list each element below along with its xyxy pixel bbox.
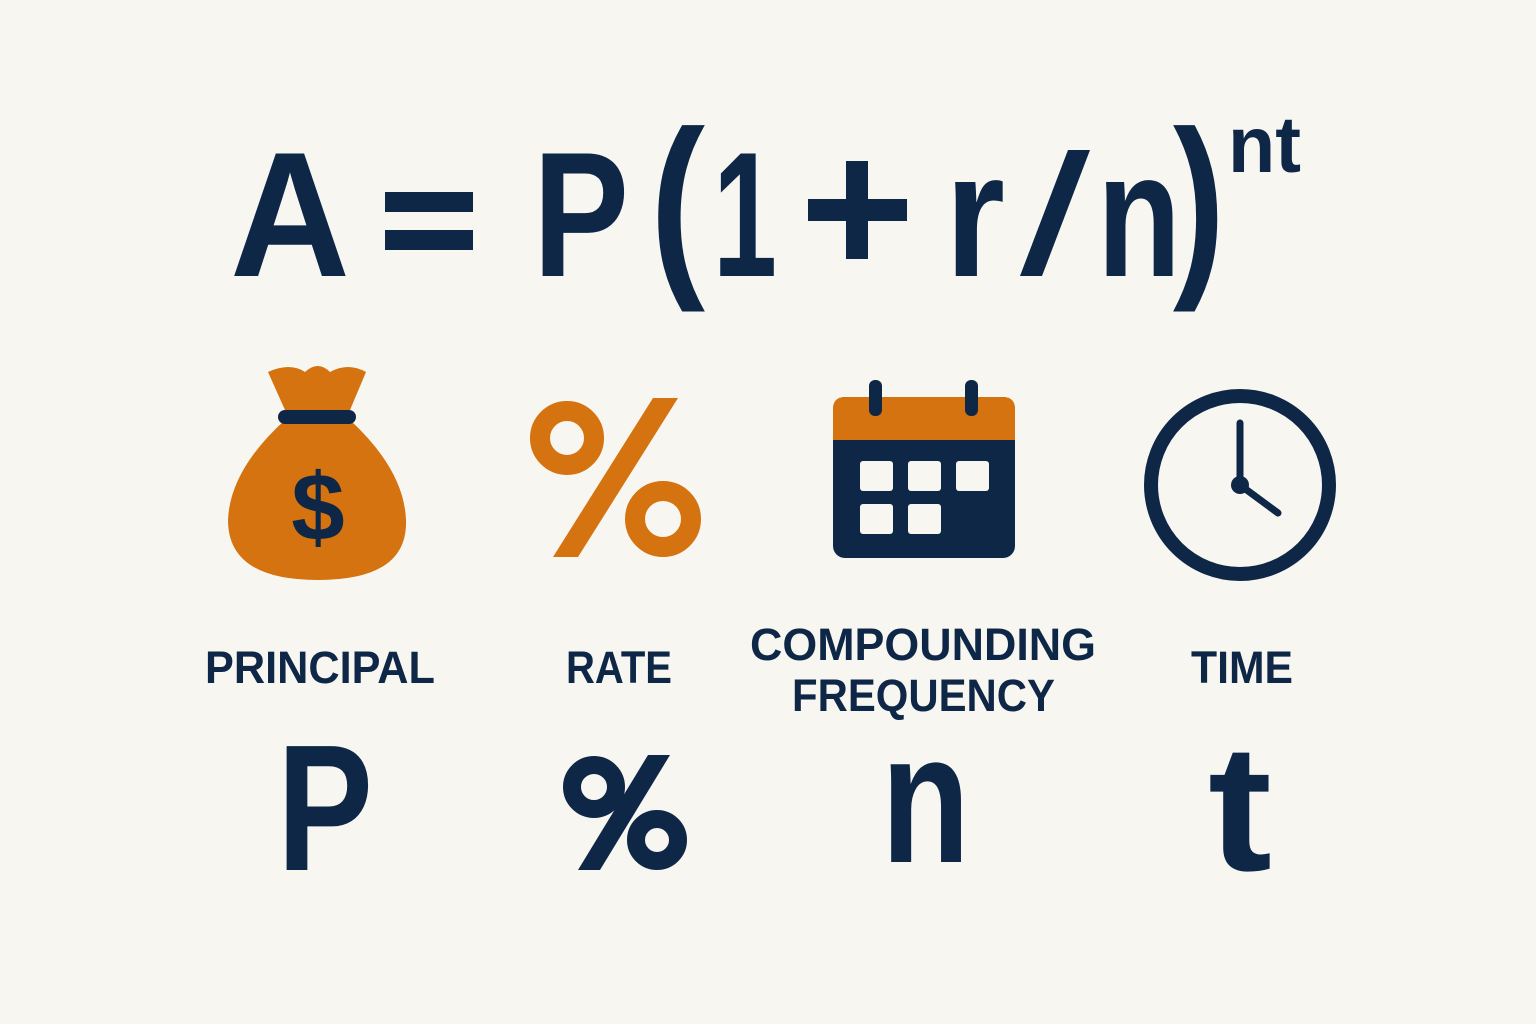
icon: money bag: $ xyxy=(291,454,345,561)
title: formula: r xyxy=(945,115,1005,314)
icon: percent xyxy=(540,398,691,557)
symbol: t: t xyxy=(1208,708,1272,909)
label: compounding frequency: COMPOUNDING xyxy=(750,619,1096,670)
label: rate: RATE xyxy=(566,642,672,693)
label: time: TIME xyxy=(1191,642,1293,693)
icon: money bag xyxy=(228,366,406,580)
symbol: P: P xyxy=(277,708,373,909)
title: formula: nt xyxy=(1228,100,1301,189)
title: formula: n xyxy=(1097,115,1181,314)
symbol: n: n xyxy=(881,696,970,902)
title: formula: A xyxy=(230,115,350,314)
symbol: percent xyxy=(572,755,678,870)
label: compounding frequency: FREQUENCY xyxy=(792,670,1055,721)
title: formula: ) xyxy=(1173,90,1225,313)
label: compounding frequency xyxy=(750,619,1096,721)
title: formula: 1 xyxy=(713,115,777,314)
label: principal: PRINCIPAL xyxy=(205,642,435,693)
title: formula: ( xyxy=(650,90,705,313)
title: formula xyxy=(230,90,1301,314)
icon: clock xyxy=(1151,396,1329,574)
icon: calendar xyxy=(833,380,1015,558)
title: formula: P xyxy=(533,115,629,314)
